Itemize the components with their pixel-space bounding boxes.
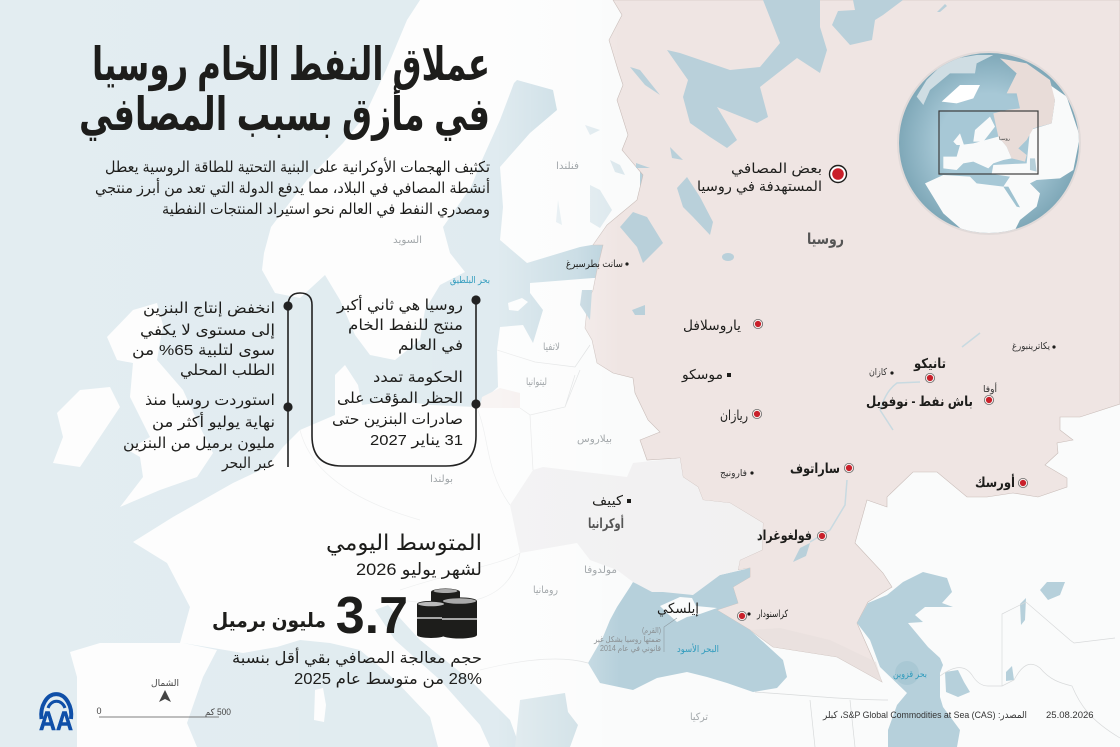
text block: gasoline imports: استوردت روسيا منذ: [145, 392, 275, 409]
refinery labels: ياروسلافل: [683, 318, 741, 334]
map labels: seas: [450, 275, 927, 685]
subtitle: ومصدري النفط في العالم نحو استيراد المنتجات النفطية: [162, 201, 490, 219]
unit label: مليون برميل: [212, 610, 326, 632]
subtitle: تكثيف الهجمات الأوكرانية على البنية التحتية للطاقة الروسية يعطل: [105, 157, 490, 176]
map labels: countries: رومانيا: [533, 585, 558, 596]
map labels: seas: بحر البلطيق: [450, 275, 490, 285]
subtitle: [95, 157, 490, 219]
stat heading: [326, 530, 482, 580]
text block: gasoline production fell: الطلب المحلي: [180, 362, 275, 380]
map: rivers: [810, 333, 980, 542]
icon: AA logo: [39, 694, 73, 736]
source: المصدر: S&P Global Commodities at Sea (CAS)، كبلر: [822, 710, 1027, 721]
map labels: reference cities: [566, 259, 1056, 620]
map labels: countries: السويد: [393, 235, 422, 246]
timeline line with dots: [283, 293, 481, 467]
text block: export ban extended: [332, 369, 463, 449]
title: [79, 38, 490, 141]
scale bar: 500 كم: [205, 707, 231, 718]
icon: oil barrels: [417, 588, 477, 638]
inset globe: روسيا: [999, 136, 1010, 141]
stat description: [232, 647, 482, 688]
map labels: countries: [393, 161, 844, 723]
text block: second largest producer: روسيا هي ثاني أكبر: [336, 295, 463, 315]
Crimea note: قانوني في عام 2014: [600, 644, 661, 653]
map: Great Britain: [107, 303, 213, 507]
map labels: countries: روسيا: [807, 231, 844, 248]
map: land of Scandinavia: [262, 0, 640, 360]
text block: gasoline production fell: إلى مستوى لا يكفي: [140, 322, 275, 340]
title: عملاق النفط الخام روسيا: [92, 38, 490, 91]
text block: gasoline imports: مليون برميل من البنزين: [123, 435, 275, 452]
stat description: حجم معالجة المصافي بقي أقل بنسبة: [232, 647, 482, 668]
map labels: countries: لاتفيا: [543, 342, 560, 353]
map labels: countries: مولدوفا: [584, 565, 617, 576]
big number: 3.7: [336, 587, 408, 645]
scale bar: [96, 706, 231, 718]
stat description: 28% من متوسط عام 2025: [294, 671, 482, 688]
map: Aegean sea: [515, 693, 578, 747]
map: Kara-Bogaz and Aral lakes: [945, 582, 1065, 697]
text block: gasoline imports: [123, 392, 275, 472]
map labels: countries: فنلندا: [556, 161, 579, 172]
title: في مأزق بسبب المصافي: [79, 84, 490, 141]
Crimea note: ضمتها روسيا بشكل غير: [593, 635, 661, 644]
refinery labels: ساراتوف: [790, 461, 840, 476]
text block: export ban extended: صادرات البنزين حتى: [332, 411, 463, 428]
icon: AA logo: AA: [39, 706, 73, 736]
scale bar: 0: [96, 706, 102, 716]
refinery labels: إيلسكي: [657, 600, 699, 617]
text block: second largest producer: في العالم: [398, 337, 463, 355]
map labels: countries: بيلاروس: [577, 434, 612, 445]
refinery labels: [657, 318, 1015, 617]
map labels: reference cities: فارونيج: [720, 468, 747, 479]
north arrow: الشمال: [151, 678, 179, 688]
map: Ukraine: [510, 458, 763, 595]
map labels: reference cities: كراسنودار: [756, 609, 788, 620]
map: Kaliningrad: [480, 388, 520, 408]
refinery labels: فولغوغراد: [757, 528, 812, 543]
map: Finnish lakes: [556, 125, 625, 228]
inset globe: [897, 51, 1081, 237]
map labels: seas: البحر الأسود: [677, 643, 719, 654]
map: Caspian Sea: [857, 572, 960, 747]
map labels: reference cities: سانت بطرسبرغ: [566, 259, 623, 270]
refinery labels: أورسك: [975, 474, 1015, 490]
map labels: countries: تركيا: [690, 712, 708, 723]
map: Russia: [585, 0, 1120, 682]
map: Kazakhstan and Uzbekistan borders: [300, 345, 1120, 747]
text block: gasoline production fell: سوى لتلبية 65% من: [132, 342, 275, 359]
text block: gasoline imports: نهاية يوليو أكثر من: [152, 412, 275, 431]
refinery labels: تانيكو: [913, 356, 946, 371]
north arrow: [151, 678, 179, 702]
map: Ireland: [53, 387, 120, 467]
refinery labels: باش نفط - نوفويل: [866, 394, 973, 409]
map: Adriatic and Ionian sea: [375, 605, 520, 747]
map: Mediterranean sea: [183, 640, 438, 747]
map: Black Sea: [588, 568, 787, 692]
Crimea note: [593, 618, 677, 653]
map: continental Europe: [70, 278, 1120, 747]
Crimea note: (القرم): [642, 626, 661, 635]
text block: gasoline production fell: انخفض إنتاج البنزين: [143, 300, 275, 318]
map: Corsica and Sardinia: [314, 688, 326, 722]
stat heading: المتوسط اليومي: [326, 530, 482, 556]
text block: second largest producer: منتج للنفط الخام: [348, 317, 463, 334]
legend: targeted refineries: المستهدفة في روسيا: [697, 178, 822, 195]
map: Crimea annexed area: [660, 597, 717, 622]
text block: export ban extended: الحظر المؤقت على: [337, 390, 463, 407]
subtitle: أنشطة المصافي في البلاد، مما يدفع الدولة التي تعد من أبرز منتجي: [95, 178, 490, 198]
map labels: countries: أوكرانيا: [588, 515, 624, 531]
map labels: seas: بحر قزوين: [893, 669, 927, 679]
map labels: reference cities: أوفا: [983, 382, 997, 395]
stat heading: لشهر يوليو 2026: [356, 560, 482, 580]
map: lakes and White Sea of Russia: [580, 0, 947, 562]
text block: second largest producer: [336, 295, 463, 355]
refinery labels: ريازان: [720, 408, 748, 424]
map: Baltic left fade overlay: [0, 0, 620, 747]
map labels: countries: ليتوانيا: [526, 377, 547, 388]
date: 25.08.2026: [1046, 710, 1094, 721]
map labels: countries: بولندا: [430, 474, 453, 485]
legend: targeted refineries: [697, 160, 846, 195]
text block: gasoline production fell: [132, 300, 275, 380]
map labels: reference cities: يكاترينبورغ: [1012, 341, 1050, 352]
text block: gasoline imports: عبر البحر: [221, 455, 275, 472]
legend: targeted refineries: بعض المصافي: [731, 160, 822, 177]
text block: export ban extended: 31 يناير 2027: [370, 432, 463, 449]
map labels: reference cities: موسكو: [681, 367, 723, 383]
refinery markers: [737, 319, 1028, 621]
map labels: reference cities: كييف: [592, 493, 624, 508]
map: Caucasus relief: [750, 628, 882, 682]
map: Estonian islands: [508, 298, 528, 311]
map labels: reference cities: كازان: [869, 367, 887, 378]
text block: export ban extended: الحكومة تمدد: [373, 369, 463, 386]
